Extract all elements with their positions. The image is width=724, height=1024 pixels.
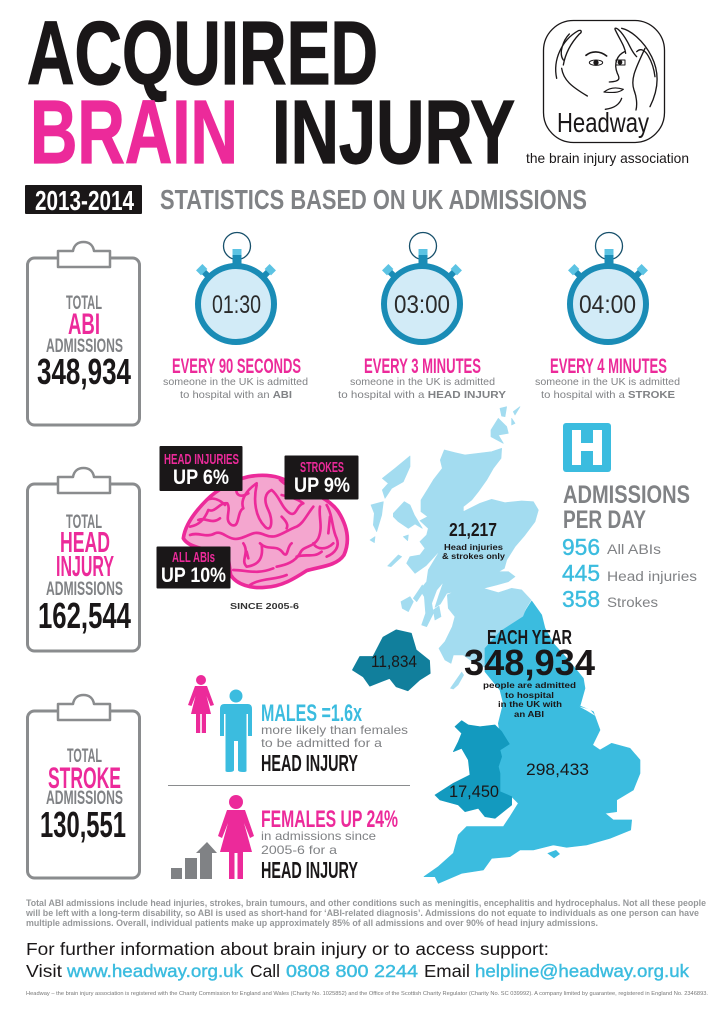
footnote [25, 898, 706, 928]
females statistic: 2005-6 for a [261, 843, 337, 857]
callout: all ABIs up 10% [156, 546, 230, 588]
panel: total ABI admissions: TOTAL [66, 293, 102, 314]
females statistic: HEAD INJURY [261, 857, 358, 883]
stopwatch: 90 seconds: to hospital with an ABI [180, 389, 292, 401]
panel: total ABI admissions: ABI [68, 308, 100, 341]
males statistic: more likely than females [261, 723, 408, 737]
stopwatch: 4 minutes: to hospital with a STROKE [541, 389, 675, 401]
logo: Headway: Headway [557, 107, 649, 138]
contact information: helpline@headway.org.uk [475, 961, 689, 981]
panel: admissions per day: 358 [562, 586, 600, 612]
map labels: 21,217 [449, 520, 497, 540]
map: Isle of Man [450, 672, 464, 689]
logo: Headway [526, 20, 689, 166]
map: Northern Ireland [353, 630, 430, 691]
map labels: Head injuries [444, 542, 503, 552]
map labels: people are admitted [483, 680, 576, 690]
stopwatch: 90 seconds: EVERY 90 SECONDS [172, 355, 301, 378]
panel: total head injury admissions: TOTAL [66, 512, 102, 533]
panel: admissions per day: Head injuries [607, 569, 697, 584]
stopwatch: 3 minutes: to hospital with a HEAD INJURY [338, 389, 506, 401]
map labels: 298,433 [526, 760, 589, 779]
map: Scotland [370, 407, 538, 668]
stopwatch: 3 minutes [338, 232, 506, 401]
map labels [371, 520, 595, 801]
footnote: multiple admissions. Overall, individual patients make up approximately 85% of all admissions and over 90% of head injury admissions. [26, 918, 598, 928]
contact information: Call [250, 961, 280, 981]
map labels: & strokes only [442, 551, 505, 561]
callout: strokes up 9%: STROKES [300, 460, 344, 476]
title: INJURY [272, 83, 515, 183]
panel: total head injury admissions: 162,544 [38, 595, 131, 636]
footnote: Total ABI admissions include head injuries, strokes, brain tumours, and other conditions such as meningitis, encephalitis and hydrocephalus. Not all these people [26, 898, 706, 908]
icon: female figure [218, 795, 254, 879]
panel: total head injury admissions: HEAD [60, 527, 110, 559]
map labels: in the UK with [498, 699, 562, 709]
stopwatch: 4 minutes: 04:00 [579, 291, 636, 319]
title: BRAIN [30, 83, 238, 183]
icon: hospital H [563, 423, 611, 472]
stopwatch: 3 minutes: EVERY 3 MINUTES [364, 355, 481, 378]
footnote: will be left with a long-term disability, so ABI is used as short-hand for ‘ABI-related diagnosis’. Admissions do not equate to individuals as one person can have [25, 908, 699, 918]
map: Isle of Wight [547, 850, 560, 858]
map: Humber estuary [579, 707, 596, 716]
stopwatch: 90 seconds: someone in the UK is admitted [163, 376, 308, 388]
panel: total stroke admissions: STROKE [48, 762, 121, 795]
panel: total ABI admissions: ADMISSIONS [46, 336, 123, 357]
date badge: 2013-2014 [35, 185, 134, 216]
contact information: Email [424, 961, 470, 981]
callout: all ABIs up 10%: ALL ABIs [172, 550, 215, 566]
stopwatch: 90 seconds [163, 232, 308, 401]
map labels: to hospital [505, 690, 554, 700]
callout: head injuries up 6%: HEAD INJURIES [164, 452, 239, 468]
panel: admissions per day: All ABIs [607, 542, 661, 557]
panel: admissions per day: PER DAY [563, 506, 646, 534]
contact information [26, 939, 689, 981]
panel: total head injury admissions [28, 468, 140, 651]
title [27, 4, 515, 183]
callout: strokes up 9% [284, 456, 358, 500]
contact information: For further information about brain injury or to access support: [26, 939, 549, 959]
contact information: Visit [26, 961, 62, 981]
panel: total stroke admissions [28, 695, 140, 878]
panel: admissions per day: 956 [562, 534, 600, 560]
panel: admissions per day: ADMISSIONS [563, 481, 690, 509]
map labels: an ABI [514, 709, 544, 719]
title: ACQUIRED [27, 4, 378, 104]
since label: SINCE 2005-6 [230, 601, 299, 611]
callout: head injuries up 6%: UP 6% [173, 466, 229, 489]
logo: Headway: the brain injury association [526, 150, 689, 166]
males statistic: HEAD INJURY [261, 750, 358, 776]
map labels: 11,834 [371, 652, 417, 671]
panel: total head injury admissions: INJURY [56, 551, 114, 583]
females statistic [261, 806, 398, 883]
callout: all ABIs up 10%: UP 10% [161, 564, 226, 587]
contact information: 0808 800 2244 [286, 961, 418, 981]
panel: total head injury admissions: ADMISSIONS [46, 579, 123, 600]
panel: total ABI admissions [28, 242, 140, 425]
map labels: 348,934 [464, 642, 595, 683]
icon: rising bars [171, 842, 217, 879]
panel: total stroke admissions: 130,551 [40, 804, 126, 845]
stopwatch: 4 minutes [535, 232, 680, 401]
map labels: EACH YEAR [487, 627, 572, 649]
panel: admissions per day [562, 481, 697, 612]
panel: admissions per day: Strokes [607, 595, 658, 610]
callout: head injuries up 6% [160, 446, 242, 491]
panel: total stroke admissions: ADMISSIONS [46, 788, 123, 809]
panel: total ABI admissions: 348,934 [37, 351, 131, 392]
map labels: 17,450 [449, 782, 499, 801]
subtitle: STATISTICS BASED ON UK ADMISSIONS [160, 184, 587, 215]
males statistic: to be admitted for a [261, 736, 382, 750]
females statistic: FEMALES UP 24% [261, 806, 398, 833]
icon: male figure [220, 690, 252, 772]
stopwatch: 4 minutes: someone in the UK is admitted [535, 376, 680, 388]
brain illustration [183, 475, 347, 588]
icon: small female figure [188, 675, 214, 733]
females statistic: in admissions since [261, 829, 376, 843]
callout: strokes up 9%: UP 9% [294, 474, 350, 497]
stopwatch: 3 minutes: someone in the UK is admitted [350, 376, 495, 388]
males statistic [261, 700, 408, 776]
stopwatch: 90 seconds: 01:30 [212, 291, 261, 319]
stopwatch: 3 minutes: 03:00 [394, 291, 450, 319]
UK map [353, 407, 640, 883]
charity registration line: Headway – the brain injury association is registered with the Charity Commission for England and Wales (Charity No. 1025852) and the Office of the Scottish Charity Regulator (Charity No. SC 039992). A company limited by guarantee, registered in England No. 2346893. [26, 991, 708, 997]
panel: total stroke admissions: TOTAL [67, 746, 102, 767]
contact information: www.headway.org.uk [66, 961, 243, 981]
map: Wales [435, 721, 512, 818]
panel: admissions per day: 445 [562, 560, 600, 586]
males statistic: MALES =1.6x [261, 700, 362, 727]
map: England [424, 601, 640, 883]
